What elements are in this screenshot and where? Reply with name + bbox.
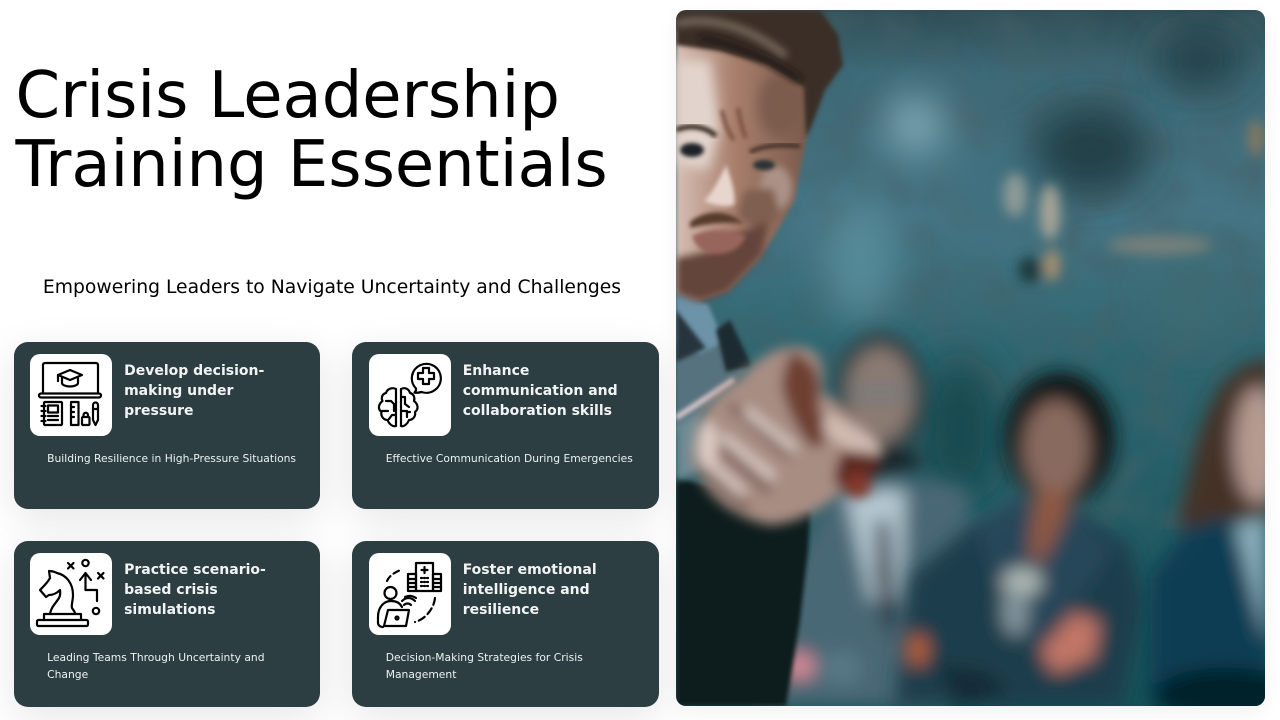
- person 4: blurred woman at right edge: [1150, 358, 1280, 720]
- card heading: Enhance: [463, 363, 529, 379]
- card heading: [463, 363, 618, 419]
- card heading: [124, 363, 264, 419]
- card description: Effective Communication During Emergencies: [386, 452, 633, 465]
- card heading: [463, 562, 597, 618]
- card heading: communication and: [463, 383, 618, 399]
- icon: laptop with graduation cap and stationery: [30, 354, 112, 436]
- card heading: based crisis: [124, 582, 218, 598]
- card heading: Foster emotional: [463, 562, 597, 578]
- card description: Building Resilience in High-Pressure Situations: [47, 452, 296, 465]
- icon: remote worker, hospital and wifi: [369, 552, 451, 634]
- card heading: simulations: [124, 602, 215, 618]
- pointing man: suit and arm: [676, 290, 810, 706]
- panel: decision-making card: [14, 342, 320, 508]
- panel: emotional intelligence card: [352, 540, 659, 707]
- person 3: blurred woman with crossed arms: [895, 372, 1144, 706]
- title: [15, 59, 608, 202]
- title: Training Essentials: [16, 128, 608, 202]
- card heading: intelligence and: [463, 582, 590, 598]
- icon: chess knight with strategy marks: [30, 552, 112, 634]
- photo: leader pointing in front of blurred team: [676, 10, 1265, 706]
- pointing man: hand: [692, 347, 883, 525]
- wall background: [676, 10, 1265, 706]
- icon: brain with medical speech bubble: [369, 354, 451, 436]
- panel: simulations card: [14, 540, 320, 707]
- subtitle: Empowering Leaders to Navigate Uncertainty and Challenges: [43, 277, 621, 298]
- title: Crisis Leadership: [16, 59, 560, 133]
- card description: Decision-Making Strategies for Crisis Management: [386, 650, 583, 680]
- card description: Leading Teams Through Uncertainty and Change: [47, 650, 265, 680]
- card heading: Develop decision-: [124, 363, 264, 379]
- card heading: pressure: [124, 403, 194, 419]
- panel: communication card: [352, 342, 659, 508]
- card heading: resilience: [463, 602, 539, 618]
- card heading: making under: [124, 383, 233, 399]
- card heading: [124, 562, 266, 618]
- person 2: blurred man in grey suit: [760, 333, 980, 706]
- card heading: collaboration skills: [463, 403, 612, 419]
- pointing man: head and face: [676, 10, 843, 302]
- card heading: Practice scenario-: [124, 562, 266, 578]
